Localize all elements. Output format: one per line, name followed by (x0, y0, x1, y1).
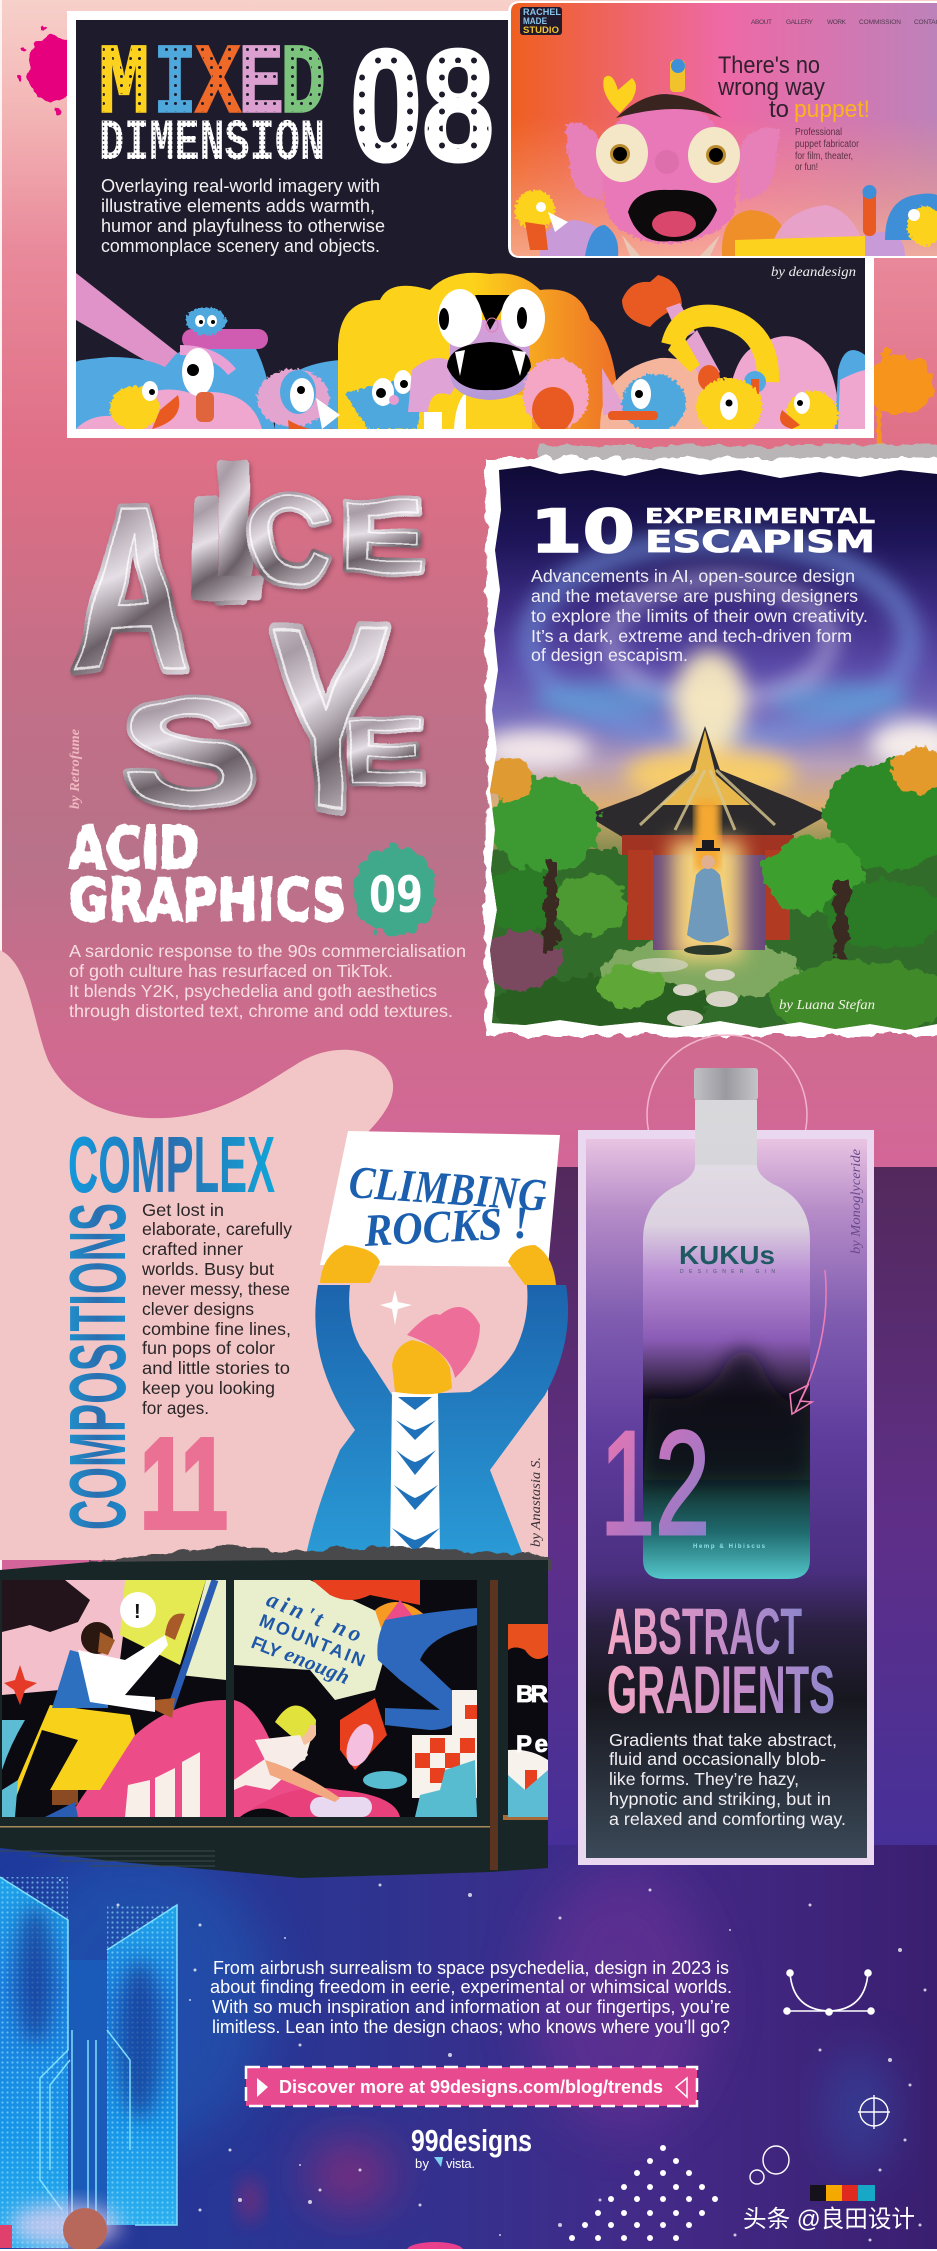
watermark text: 头条 @良田设计 (743, 2206, 915, 2233)
title: mixed: X (195, 30, 242, 143)
body text: elaborate, carefully (142, 1219, 292, 1239)
cta button (246, 2067, 697, 2106)
window 2: FLY (249, 1632, 284, 1662)
puppet head (565, 59, 780, 256)
chrome base: A (72, 459, 191, 717)
closing text: limitless. Lean into the design chaos; who knows where you’ll go? (212, 2017, 730, 2037)
number 11: 11 (141, 1413, 227, 1554)
body text (609, 1730, 846, 1829)
body text: crafted inner (142, 1239, 243, 1259)
body text: to explore the limits of their own creativity. (531, 606, 868, 626)
body text: clever designs (142, 1299, 254, 1319)
chrome base: L (190, 469, 263, 626)
hair and face (392, 1340, 452, 1394)
card scenery (540, 220, 597, 256)
body text: Advancements in AI, open-source design (531, 566, 855, 586)
bun (407, 1307, 480, 1378)
window 2 (234, 1580, 477, 1817)
window 2: MOUNTAIN (257, 1610, 368, 1671)
logo: 99designs: 99designs (411, 2123, 532, 2158)
label: hemp: Hemp & Hibiscus (693, 1544, 766, 1550)
icon: bezier curve (784, 1970, 874, 2015)
number 12: 12 (600, 1401, 710, 1566)
painting (480, 460, 937, 1040)
white frame (67, 11, 874, 438)
body text (141, 1200, 292, 1418)
credit: by Anastasia S. (529, 1457, 544, 1547)
body text: and little stories to (142, 1358, 290, 1378)
neon towers (0, 1877, 177, 2251)
title: mixed (98, 30, 326, 143)
bottle (640, 1068, 815, 1580)
window 2: ain't no (263, 1586, 365, 1647)
window 2: enough (281, 1641, 353, 1689)
logo: MADE (523, 16, 547, 26)
body text: Get lost in (142, 1200, 224, 1220)
body text: combine fine lines, (142, 1319, 291, 1339)
body text: Gradients that take abstract, (609, 1730, 837, 1750)
logo: 99designs: by (415, 2156, 430, 2171)
chrome highlights (72, 459, 426, 867)
sign lettering: CLIMBING (347, 1156, 548, 1221)
chrome highlights: E (345, 696, 426, 806)
title: compositions vertical: COMPOSITIONS (53, 1203, 142, 1530)
nav: ABOUT (751, 19, 772, 26)
chrome lettering (72, 420, 426, 867)
big yellow cloud (338, 273, 620, 429)
pale pink blob behind section 11 (0, 950, 548, 1560)
card heading: puppet! (794, 96, 870, 123)
title: escapism: ESCAPISM (645, 525, 875, 560)
title: mixed: I (153, 30, 197, 143)
body text: like forms. They’re hazy, (609, 1769, 799, 1789)
body text: It blends Y2K, psychedelia and goth aesthetics (69, 981, 437, 1001)
body text (69, 941, 466, 1021)
number badge (354, 845, 436, 937)
body text: a relaxed and comforting way. (609, 1809, 846, 1829)
card heading (717, 52, 870, 123)
body text (531, 566, 868, 665)
watermark colour squares (810, 2185, 875, 2201)
body text: illustrative elements adds warmth, (101, 196, 375, 216)
logo: 99designs: vista. (446, 2156, 475, 2171)
bottom edge (0, 2249, 937, 2251)
dark panel (76, 20, 865, 429)
circle ornament (647, 1035, 807, 1195)
logo: STUDIO (523, 25, 559, 35)
stars (59, 1879, 926, 2242)
panel: 08 mixed dimension (67, 11, 874, 443)
torn grey backing (540, 445, 937, 470)
arrow (790, 1270, 826, 1414)
number badge: 09 (369, 866, 423, 924)
card body: or fun! (795, 162, 818, 173)
title: mixed: M (98, 30, 150, 143)
ground (485, 850, 937, 1040)
frame (578, 1130, 874, 1865)
chrome highlights: Y (268, 573, 388, 867)
body text: humor and playfulness to otherwise (101, 216, 385, 236)
closing text (210, 1958, 732, 2037)
window 3: BR (516, 1681, 548, 1708)
footer background (0, 1845, 937, 2251)
nav: WORK (827, 19, 847, 26)
nav: COMMISSION (859, 19, 901, 26)
card heading: wrong way (717, 74, 825, 101)
chrome highlights: C (245, 475, 332, 609)
nav: GALLERY (786, 19, 814, 26)
chrome base: I (212, 420, 256, 643)
card heading: There's no (718, 52, 820, 79)
illustration: puppet characters (76, 273, 865, 443)
logo (520, 7, 562, 35)
splat: pink (15, 26, 76, 113)
panel: 09 acid graphics (69, 814, 466, 1021)
closing text: With so much inspiration and information at our fingertips, you’re (212, 1997, 730, 2017)
splat: orange (858, 350, 934, 458)
hands (320, 1245, 380, 1283)
trees (480, 746, 937, 1005)
stepping stones (632, 958, 738, 1026)
chrome highlights: S (120, 665, 259, 836)
arms and body (305, 1285, 568, 1560)
shirt (390, 1392, 440, 1555)
body text: It’s a dark, extreme and tech-driven form (531, 626, 852, 646)
card body: for film, theater, (795, 151, 853, 162)
window 3 (508, 1624, 548, 1817)
number 08: 08 (350, 18, 494, 194)
chrome highlights: E (340, 477, 424, 595)
gradient interior (586, 1139, 867, 1858)
body text (101, 176, 385, 256)
closing text: about finding freedom in eerie, experimental or whimsical worlds. (210, 1977, 732, 1997)
body text: Overlaying real-world imagery with (101, 176, 380, 196)
illustration: person with sign (305, 1131, 568, 1560)
card body: puppet fabricator (795, 139, 860, 150)
window 1 (2, 1580, 226, 1817)
panel: 12 abstract gradients (578, 1035, 874, 1865)
card heading: to (769, 96, 789, 123)
heading (69, 814, 346, 934)
number 10: 10 (530, 497, 635, 567)
body text: of design escapism. (531, 645, 688, 665)
title: complex: COMPLEX (68, 1120, 275, 1209)
torn grey edge (90, 1546, 548, 1570)
heading: GRAPHICS (69, 866, 346, 934)
cap (694, 1068, 758, 1100)
chrome base: C (245, 475, 332, 609)
chrome base: Y (268, 573, 388, 867)
sign (320, 1131, 560, 1267)
label: designer gin: DESIGNER GIN (680, 1269, 775, 1275)
body text: and the metaverse are pushing designers (531, 586, 858, 606)
heading: ACID (69, 814, 199, 882)
chrome base: E (345, 696, 426, 806)
body text: for ages. (142, 1398, 209, 1418)
credit: by deandesign (771, 265, 856, 280)
window 1: ! (134, 1601, 141, 1623)
mural photo (0, 1546, 548, 1878)
body text: fun pops of color (142, 1338, 275, 1358)
logo: 99designs (411, 2123, 532, 2171)
pavilion (586, 726, 828, 960)
title: experimental: EXPERIMENTAL (645, 504, 875, 528)
chrome base: E (340, 477, 424, 595)
torn white paper (485, 458, 937, 1036)
body text: fluid and occasionally blob- (609, 1749, 826, 1769)
credit: by Luana Stefan (779, 998, 875, 1013)
card body: Professional (795, 127, 842, 138)
label: kukus: KUKUs (679, 1240, 775, 1270)
body text: keep you looking (142, 1378, 275, 1398)
body text: A sardonic response to the 90s commercialisation (69, 941, 466, 961)
footer content (0, 1877, 915, 2251)
logo: RACHEL (523, 7, 562, 17)
card body (795, 127, 860, 173)
title: mixed: D (280, 30, 326, 143)
body text: never messy, these (142, 1279, 290, 1299)
body text: worlds. Busy but (141, 1259, 274, 1279)
shop front (0, 1560, 548, 1878)
window 3: Pe (516, 1731, 548, 1758)
chrome base: S (120, 665, 259, 836)
cta button: Discover more at 99designs.com/blog/trends (279, 2077, 663, 2097)
credit: retrofume: by Retrofume (68, 729, 83, 809)
illustration: person with sign: ROCKS ! (362, 1196, 530, 1256)
figure (684, 840, 732, 955)
panel: 10 experimental escapism (480, 445, 937, 1040)
title: mixed: E (238, 30, 284, 143)
body text: hypnotic and striking, but in (609, 1789, 831, 1809)
title: dimension: DIMENSION (99, 112, 325, 177)
panel: 11 complex compositions (53, 1120, 568, 1560)
icon: crosshair (858, 2095, 890, 2129)
dot triangle (569, 2145, 718, 2241)
icon: bubbles (750, 2146, 789, 2184)
closing text: From airbrush surrealism to space psychedelia, design in 2023 is (213, 1958, 729, 1978)
body text: commonplace scenery and objects. (101, 236, 380, 256)
body text: through distorted text, chrome and odd textures. (69, 1001, 453, 1021)
body text: of goth culture has resurfaced on TikTok. (69, 961, 393, 981)
nav (751, 19, 937, 26)
credit: by Monoglyceride (849, 1149, 864, 1254)
chrome highlights: A (72, 459, 191, 717)
panel: website card (508, 0, 937, 258)
chrome base (72, 420, 426, 867)
sparkle (380, 1290, 412, 1325)
